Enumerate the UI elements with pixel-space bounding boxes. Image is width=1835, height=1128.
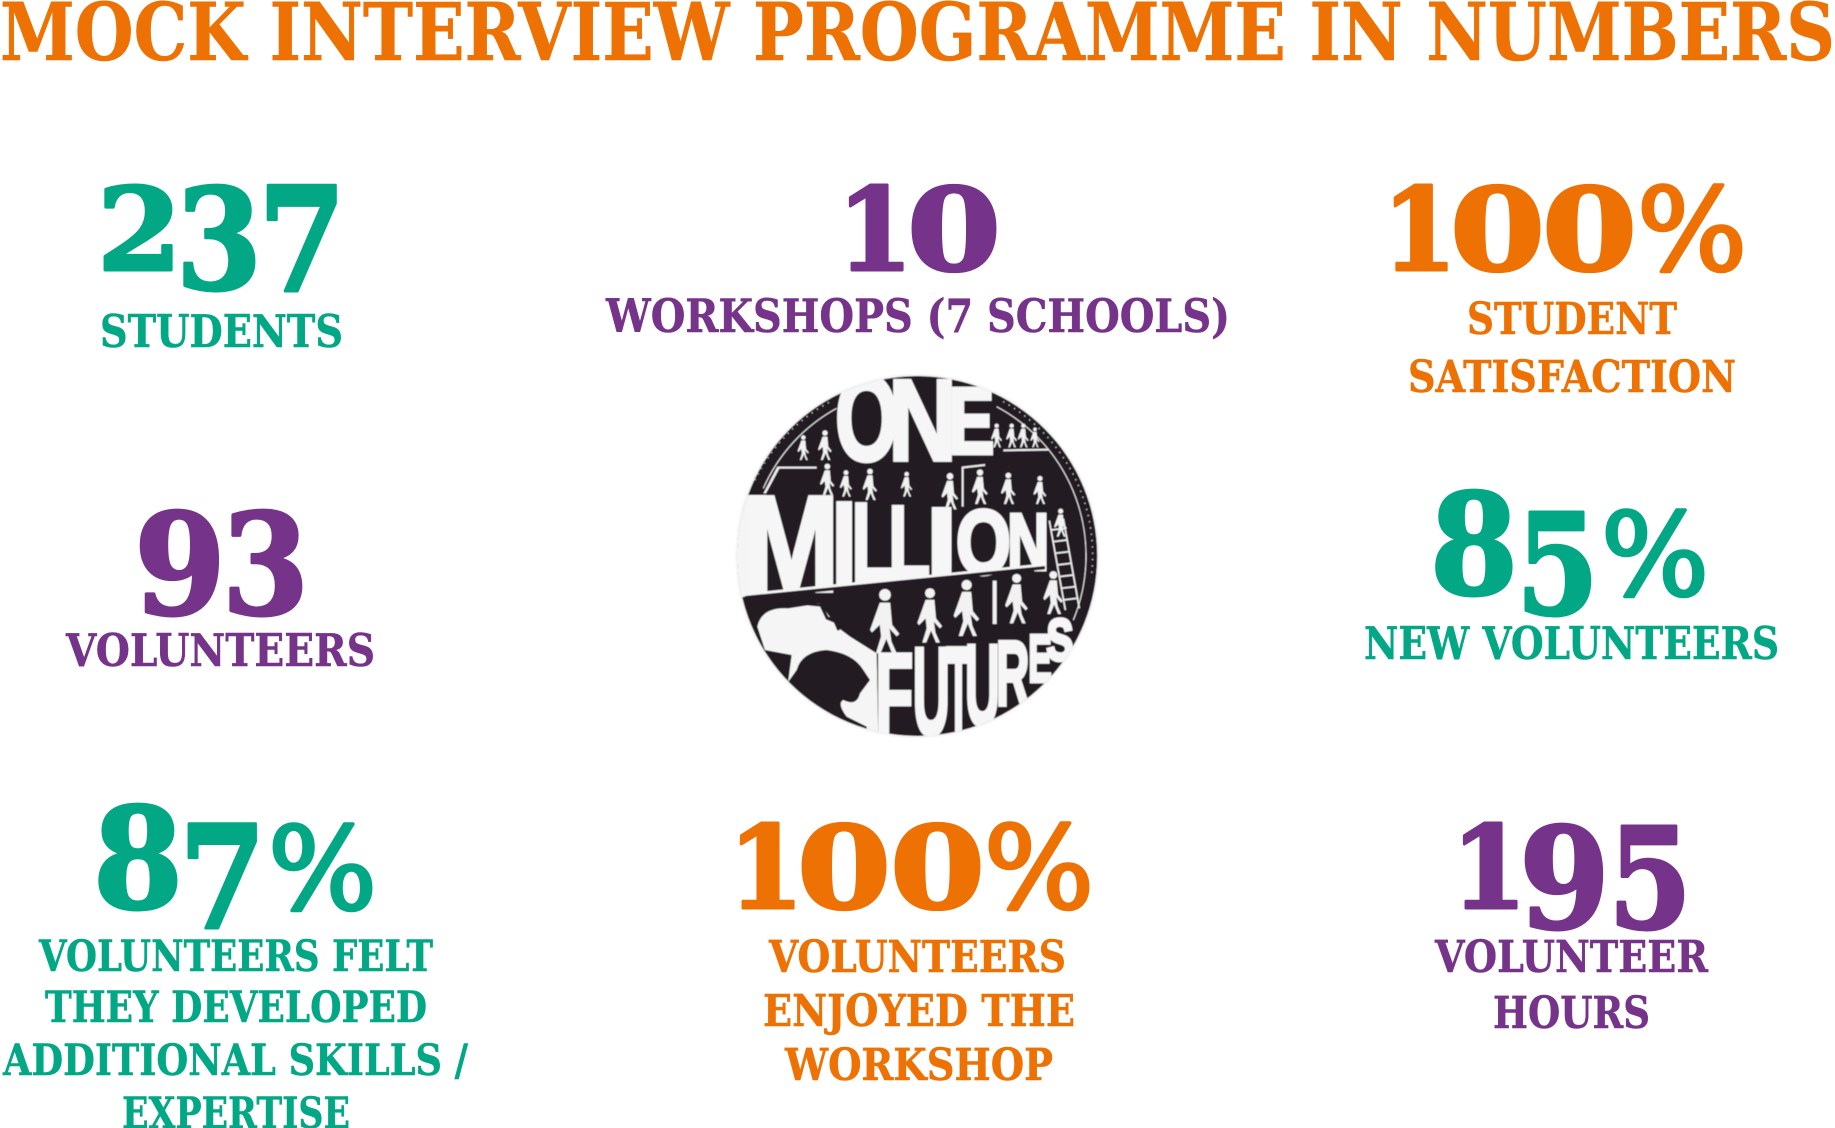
logo: One Million Futures (736, 374, 1099, 738)
number: 195: 5 (1608, 798, 1692, 962)
logo word: FUTURES: E (1028, 623, 1052, 697)
label: 100% description: ENJOYED THE (763, 986, 1075, 1037)
number: 85%: % (1601, 489, 1709, 622)
logo word: FUTURES: U (965, 622, 1000, 750)
number: 87%: 8 (93, 778, 183, 942)
number: 87%: % (268, 803, 377, 936)
logo word: MILLION: M (743, 467, 839, 620)
label: 195 description (1434, 932, 1708, 1039)
logo word: MILLION: N (1007, 497, 1049, 586)
label: 87% description: THEY DEVELOPED (45, 983, 427, 1033)
number: 10: 0 (907, 163, 1001, 297)
number: 100%: % (984, 802, 1094, 935)
label: volunteers: VOLUNTEERS (65, 624, 375, 677)
stat: 85% new volunteers (1364, 464, 1779, 670)
logo word: FUTURES: U (913, 623, 950, 762)
number: 100%: 1 (1382, 163, 1457, 297)
logo word: ONE: O (835, 351, 898, 487)
stat: 87% developed skills (2, 778, 468, 1128)
logo: ladder (1049, 519, 1079, 610)
number: 195: 9 (1519, 798, 1610, 962)
number: 100%: 0 (1542, 163, 1637, 297)
label: 87% description (2, 932, 468, 1128)
number: 237: 2 (97, 163, 182, 297)
number: 93: 3 (222, 484, 309, 648)
logo word: MILLION: O (956, 492, 1011, 594)
number: 100%: 1 (728, 801, 804, 935)
label: 100% description: VOLUNTEERS (768, 932, 1066, 983)
logo word: FUTURES: S (1047, 608, 1073, 673)
number: 100%: 0 (797, 801, 891, 935)
label: students: STUDENTS (100, 305, 343, 358)
stat: 100% student satisfaction (1382, 163, 1747, 403)
number: 85%: 5 (1516, 484, 1599, 648)
number: 100%: 0 (890, 801, 985, 935)
stat: 195 volunteer hours (1434, 798, 1708, 1039)
stat: 100% enjoyed workshop (728, 801, 1094, 1091)
number: 237: 7 (258, 156, 346, 326)
logo word: ONE: E (948, 368, 994, 474)
logo word: FUTURES: F (875, 630, 913, 758)
number: 237: 3 (176, 159, 262, 323)
logo word: MILLION: L (852, 480, 893, 606)
logo word: ONE: N (888, 357, 957, 485)
number: 93: 9 (134, 484, 226, 648)
stat: 10 workshops (605, 163, 1230, 343)
label: 100% description (763, 932, 1075, 1091)
label: 195 description: VOLUNTEER (1434, 932, 1708, 983)
logo word: MILLION: L (888, 485, 930, 602)
logo: walking figures (798, 424, 1067, 653)
stat: 237 students (97, 156, 346, 358)
label: student: STUDENT (1467, 294, 1677, 345)
label: satisfaction: SATISFACTION (1408, 352, 1736, 403)
label: 87% description: ADDITIONAL SKILLS / (2, 1036, 468, 1086)
stat: 93 volunteers (65, 484, 375, 677)
label: 100% description: WORKSHOP (784, 1040, 1053, 1091)
number: 100%: % (1637, 164, 1747, 297)
label: 87% description: VOLUNTEERS FELT (38, 932, 433, 982)
number: 85%: 8 (1430, 464, 1518, 628)
label: workshops: WORKSHOPS (7 SCHOOLS) (605, 289, 1230, 343)
number: 195: 1 (1451, 801, 1527, 935)
logo word: MILLION: I (927, 488, 957, 597)
label: 195 description: HOURS (1493, 988, 1650, 1039)
logo word: FUTURES: T (946, 620, 971, 762)
logo word: FUTURES: R (996, 623, 1029, 725)
logo word: MILLION: I (832, 478, 857, 609)
number: 100%: 0 (1450, 163, 1545, 297)
number: 10: 1 (837, 163, 913, 297)
number: 87%: 7 (179, 794, 266, 962)
